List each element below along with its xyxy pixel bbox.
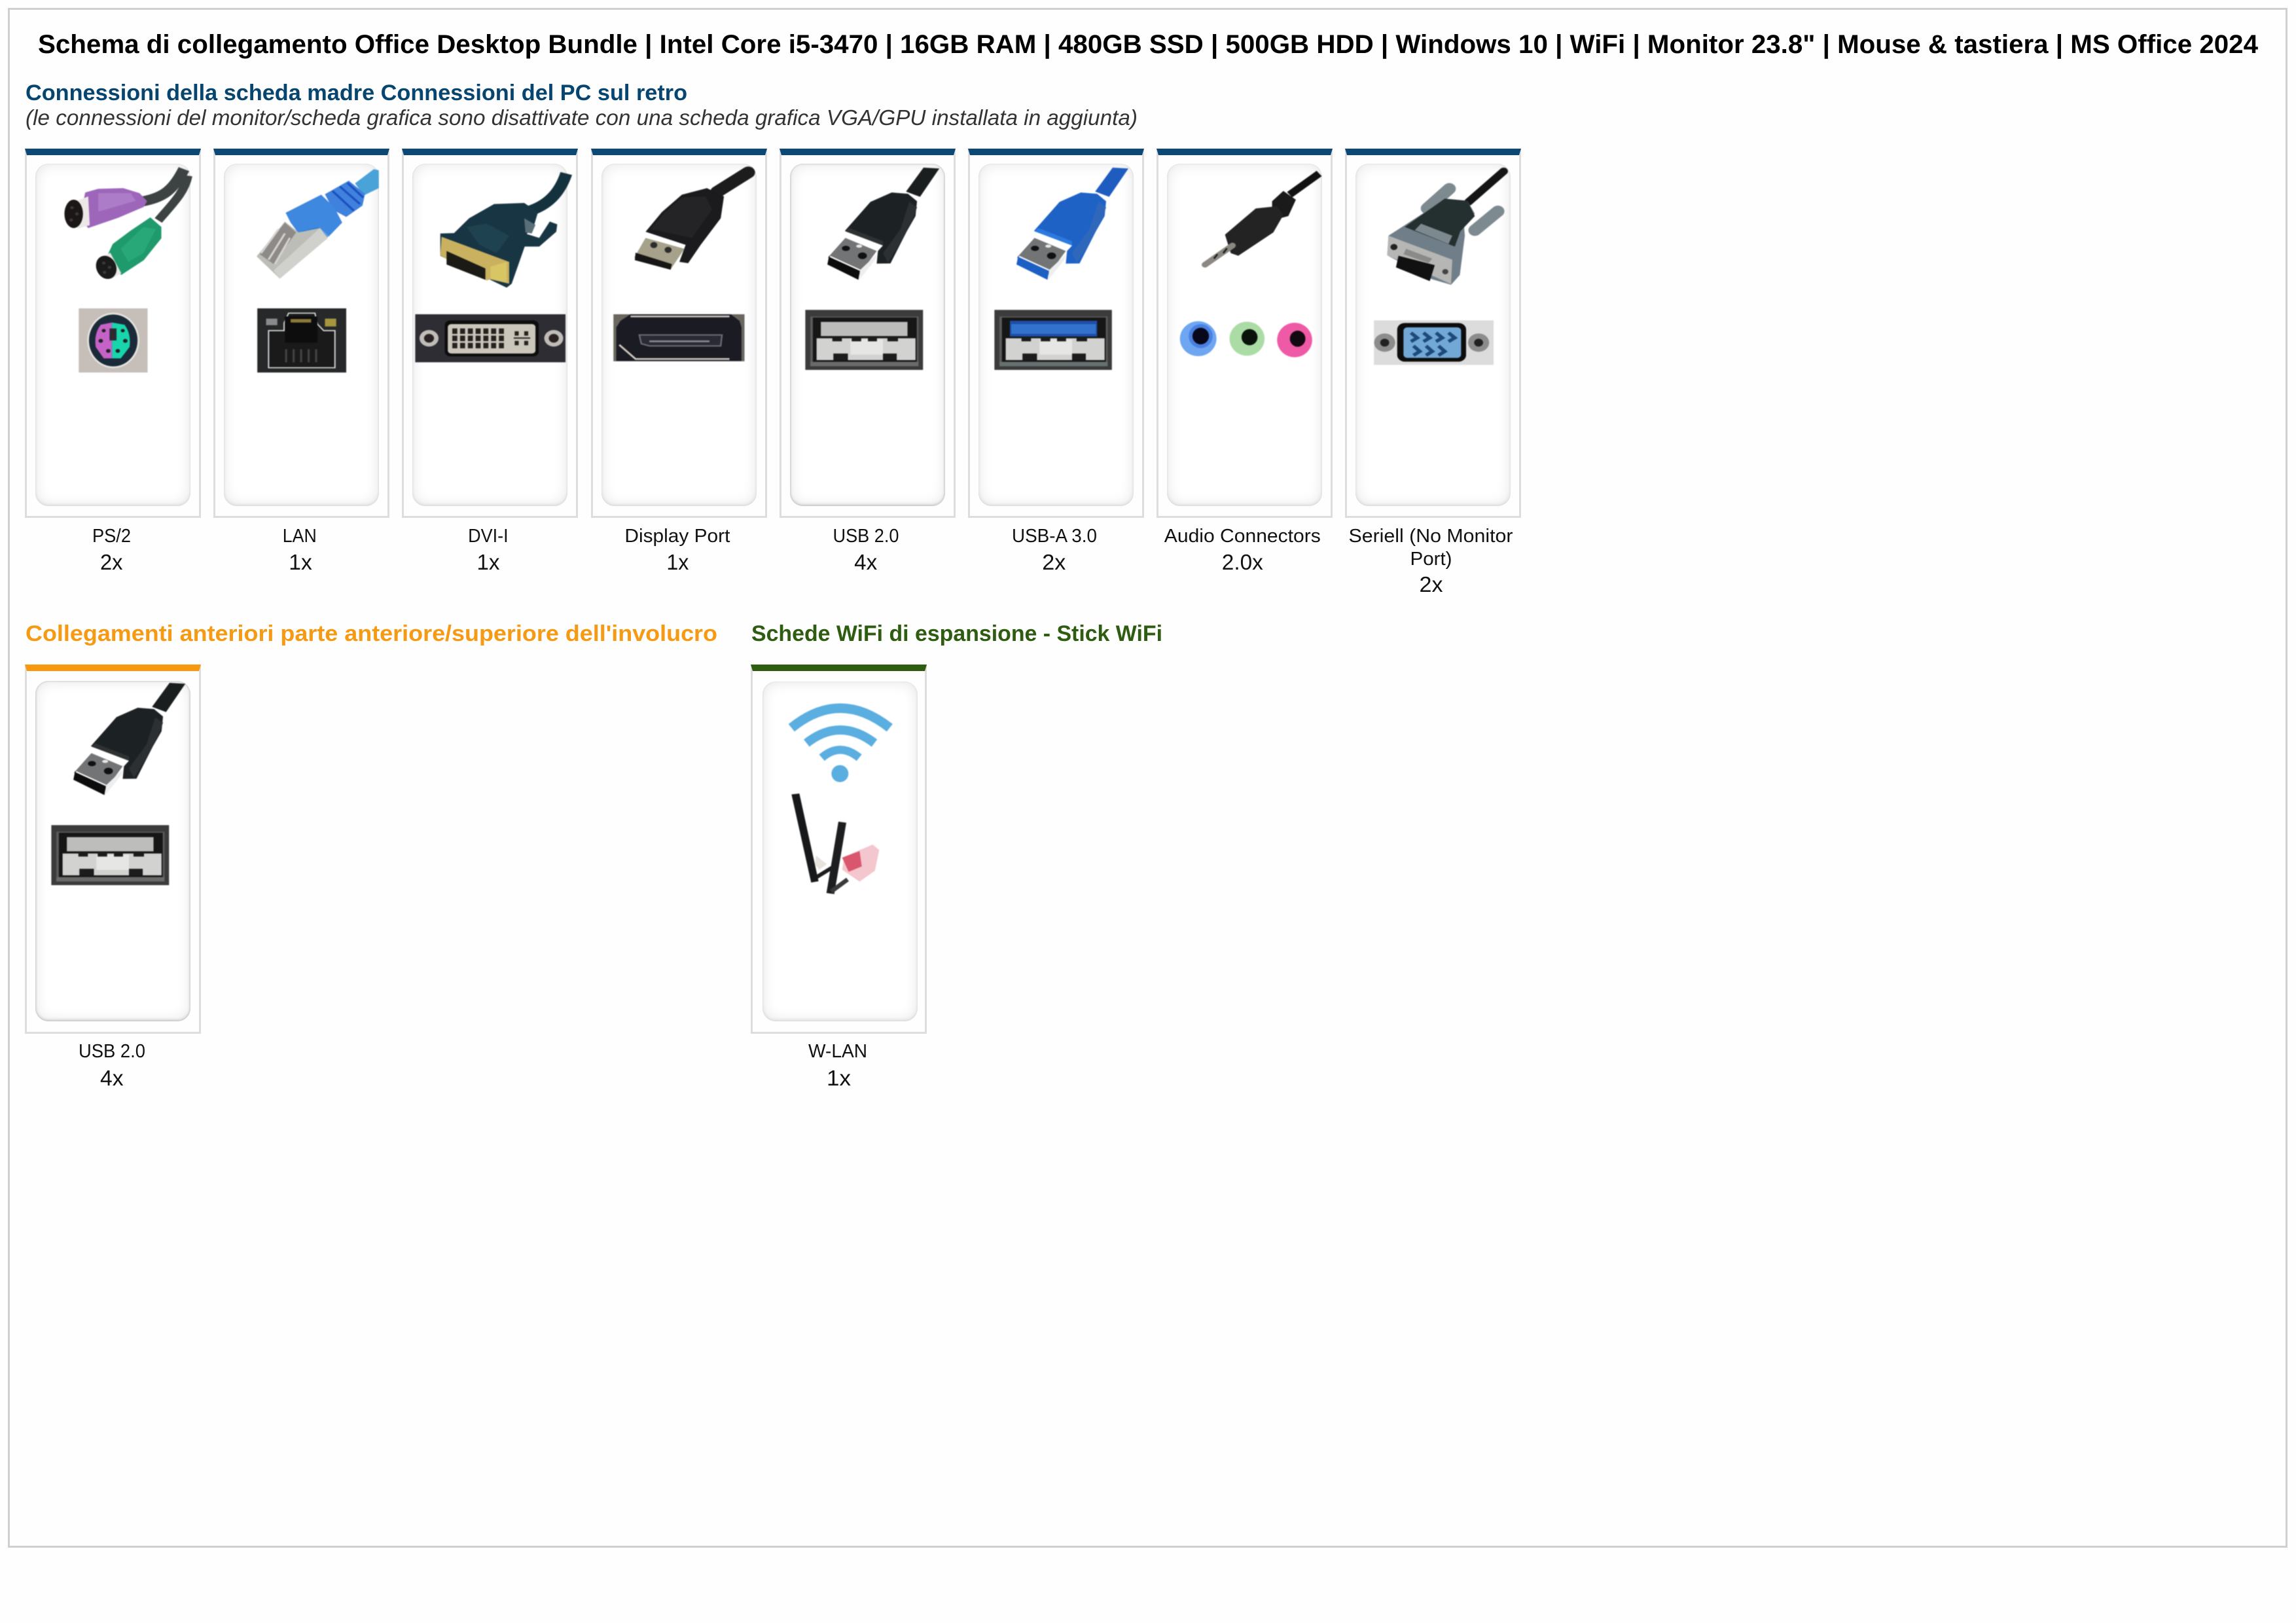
caption: DVI-I <box>468 526 509 574</box>
panel: USB-A 3.0 <box>968 149 1144 574</box>
caption: Serial: Port) <box>1410 549 1452 570</box>
caption: Audio Connectors: 2.0x <box>1222 550 1263 574</box>
panel: Serial <box>1345 149 1521 596</box>
panel: front USB 2.0 <box>25 665 201 1090</box>
caption: Audio Connectors: Audio Connectors <box>1164 526 1321 547</box>
icon: audio jack and ports <box>1179 170 1322 358</box>
caption: Audio Connectors <box>1164 526 1321 574</box>
panel: USB 2.0 <box>780 149 956 574</box>
caption: USB 2.0: 4x <box>854 550 877 574</box>
panel: LAN <box>213 149 389 574</box>
caption: USB 2.0: USB 2.0 <box>833 526 899 547</box>
caption: front USB 2.0: 4x <box>100 1066 124 1090</box>
caption: USB-A 3.0: USB-A 3.0 <box>1012 526 1097 547</box>
icon: serial plug and port <box>1373 167 1509 365</box>
caption: W-LAN <box>751 665 926 1110</box>
icon: DisplayPort plug and port <box>613 166 756 362</box>
title: Schema di collegamento Office Desktop Bundle | Intel Core i5-3470 | 16GB RAM | 480GB SSD | 500GB HDD | Windows 10 | WiFi | Monitor 23.8" | Mouse & tastiera | MS Office 2024 <box>38 30 2259 59</box>
panel: Audio Connectors <box>1157 149 1333 574</box>
icon: WiFi symbol and antenna card <box>762 681 918 910</box>
heading: front connections: Collegamenti anteriori parte anteriore/superiore dell'involucro <box>26 621 717 646</box>
caption: USB-A 3.0 <box>1012 526 1097 574</box>
caption: USB-A 3.0: 2x <box>1042 550 1066 574</box>
caption: Display Port: Display Port <box>624 526 730 547</box>
caption: front USB 2.0 <box>25 665 200 1110</box>
subheading note: (le connessioni del monitor/scheda grafica sono disattivate con una scheda grafica VGA/GPU installata in aggiunta) <box>26 105 1138 130</box>
panel: DVI-I <box>402 149 578 574</box>
icon: USB 3.0 plug and port <box>994 167 1129 371</box>
caption: PS/2 <box>92 526 131 574</box>
caption: Serial: Seriell (No Monitor <box>1349 526 1513 547</box>
caption: PS/2: PS/2 <box>92 526 131 547</box>
caption: front USB 2.0: USB 2.0 <box>79 1041 145 1062</box>
caption: DVI-I: DVI-I <box>468 526 509 547</box>
caption: Serial: 2x <box>1420 572 1443 596</box>
panel: Display Port <box>591 149 767 574</box>
caption: Display Port: 1x <box>666 550 689 574</box>
heading: rear connections: Connessioni della scheda madre Connessioni del PC sul retro <box>26 81 687 105</box>
caption: USB 2.0 <box>833 526 899 574</box>
icon: PS/2 plugs and port <box>63 166 193 373</box>
caption: W-LAN: 1x <box>827 1066 852 1090</box>
caption: LAN: LAN <box>283 526 317 547</box>
caption: W-LAN: W-LAN <box>808 1041 867 1062</box>
caption: LAN <box>283 526 317 574</box>
caption: Display Port <box>624 526 730 574</box>
icon: DVI plug and port <box>414 172 573 363</box>
caption: DVI-I: 1x <box>477 550 500 574</box>
caption: PS/2: 2x <box>100 550 123 574</box>
icon: USB 2.0 plug and port <box>804 167 940 371</box>
caption: LAN: 1x <box>289 550 312 574</box>
heading: WiFi expansion: Schede WiFi di espansione - Stick WiFi <box>751 621 1162 646</box>
panel: W-LAN <box>751 665 927 1090</box>
caption: Serial <box>1349 526 1513 596</box>
panel: PS/2 <box>25 149 201 574</box>
icon: LAN plug and port <box>257 169 380 373</box>
icon: front USB plug and port <box>35 679 190 908</box>
